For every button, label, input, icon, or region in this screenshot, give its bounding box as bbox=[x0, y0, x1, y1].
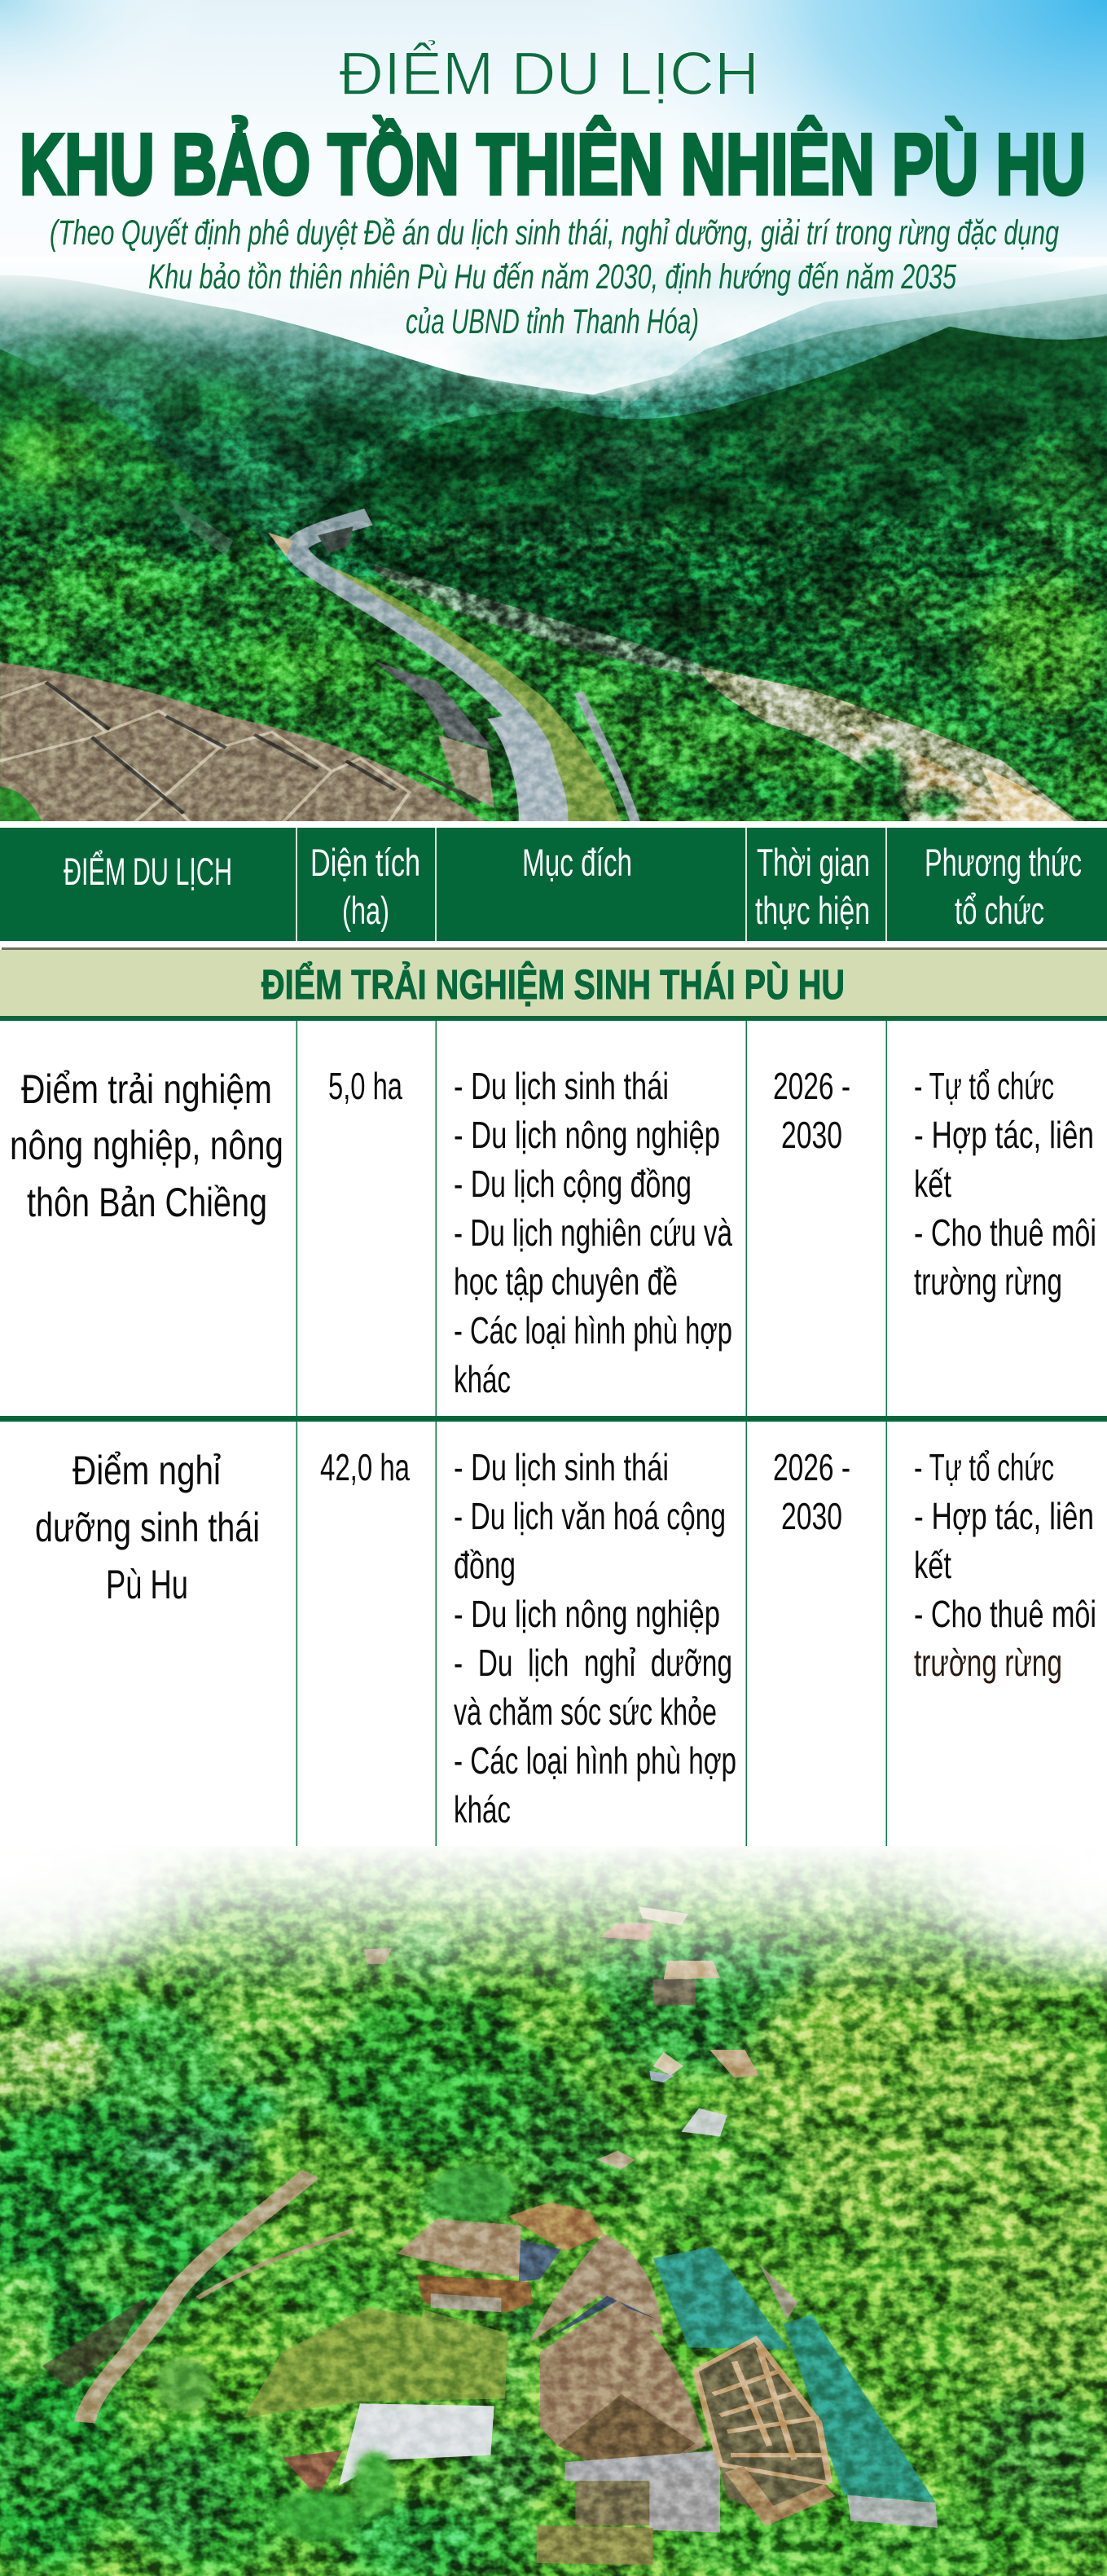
name: dưỡng sinh thái bbox=[35, 1505, 260, 1550]
table header bbox=[0, 828, 1107, 941]
table header: Thời gian bbox=[757, 841, 870, 884]
section band: ĐIỂM TRẢI NGHIỆM SINH THÁI PÙ HU bbox=[261, 961, 845, 1008]
section band bbox=[0, 947, 1107, 1021]
purpose: - Du lịch sinh thái bbox=[454, 1065, 669, 1107]
table header: ĐIỂM DU LỊCH bbox=[64, 850, 232, 893]
river and sand bank bbox=[374, 564, 1080, 823]
stilt house with thatch roof bbox=[397, 2218, 561, 2312]
retaining walls bbox=[374, 662, 494, 750]
terraced slope bbox=[0, 662, 487, 823]
hero photo: forest valley with road and sky bbox=[0, 0, 1107, 829]
purpose: - Các loại hình phù hợp bbox=[454, 1309, 732, 1352]
name: nông nghiệp, nông bbox=[10, 1123, 283, 1168]
dirt yard bbox=[508, 2202, 604, 2251]
time: 2030 bbox=[781, 1114, 842, 1156]
table header: Mục đích bbox=[522, 841, 632, 884]
time bbox=[773, 1446, 850, 1537]
column dividers bbox=[297, 1021, 887, 1846]
name bbox=[35, 1448, 260, 1607]
method bbox=[914, 1446, 1096, 1684]
name: Điểm nghỉ bbox=[72, 1448, 221, 1493]
time: 2030 bbox=[781, 1495, 842, 1537]
name: Điểm trải nghiệm bbox=[21, 1066, 272, 1112]
name: thôn Bản Chiềng bbox=[27, 1180, 267, 1225]
fog over far ridges bbox=[0, 257, 1107, 357]
purpose: - Du lịch cộng đồng bbox=[454, 1163, 692, 1205]
green verge bbox=[325, 564, 622, 823]
method bbox=[914, 1065, 1096, 1303]
banana leaves foreground bbox=[156, 2165, 516, 2542]
distant cottages bbox=[363, 1907, 759, 2169]
thatch roof lower bbox=[540, 2301, 706, 2472]
purpose bbox=[454, 1065, 732, 1400]
bottom photo: eco-lodge village and pond bbox=[0, 1729, 1107, 2576]
time bbox=[773, 1065, 850, 1156]
purpose: - Du lịch nông nghiệp bbox=[454, 1593, 720, 1635]
purpose: khác bbox=[454, 1788, 511, 1831]
highway bbox=[268, 517, 635, 823]
thatch roof upper bbox=[529, 2234, 664, 2343]
purpose: - Du lịch văn hoá cộng bbox=[454, 1495, 726, 1537]
purpose: - Du lịch nghiên cứu và bbox=[454, 1211, 732, 1254]
subtitle bbox=[50, 213, 1059, 341]
purpose: và chăm sóc sức khỏe bbox=[454, 1690, 717, 1733]
method: kết bbox=[914, 1163, 951, 1205]
dark trees along river bbox=[607, 688, 1107, 819]
purpose: đồng bbox=[454, 1544, 516, 1586]
subtitle: của UBND tỉnh Thanh Hóa) bbox=[406, 302, 699, 341]
purpose: học tập chuyên đề bbox=[454, 1260, 678, 1303]
method: kết bbox=[914, 1544, 951, 1586]
row 2: Pù Hu bbox=[35, 1446, 1096, 1831]
time: 2026 - bbox=[773, 1446, 850, 1488]
row divider bbox=[0, 1416, 1107, 1422]
title block bbox=[20, 39, 1086, 341]
purpose: - Du lịch sinh thái bbox=[454, 1446, 669, 1488]
purpose: - Du lịch nghỉ dưỡng bbox=[454, 1642, 732, 1684]
foliage masses bbox=[0, 1935, 1107, 2576]
table header: Diện tích bbox=[310, 841, 420, 884]
table header: (ha) bbox=[342, 889, 389, 932]
purpose: - Du lịch nông nghiệp bbox=[454, 1114, 720, 1156]
footpath bbox=[85, 2174, 310, 2422]
table header: tổ chức bbox=[955, 889, 1044, 932]
area: 5,0 ha bbox=[328, 1065, 402, 1107]
tree crowns bbox=[0, 1926, 1080, 2574]
timber frame bbox=[696, 2339, 829, 2516]
teal roofs bbox=[653, 2247, 938, 2528]
white tin roof bbox=[339, 2403, 494, 2486]
purpose bbox=[454, 1446, 736, 1831]
area: 42,0 ha bbox=[320, 1446, 410, 1488]
row 1: Bản Chiềng bbox=[10, 1065, 1096, 1400]
name: Pù Hu bbox=[106, 1562, 188, 1607]
table header: thực hiện bbox=[755, 889, 870, 932]
purpose: khác bbox=[454, 1358, 511, 1400]
name bbox=[10, 1066, 283, 1225]
pond bbox=[244, 2307, 508, 2418]
fire pit yard bbox=[283, 2451, 342, 2497]
purpose: - Các loại hình phù hợp bbox=[454, 1739, 736, 1782]
time: 2026 - bbox=[773, 1065, 850, 1107]
title line 1: ĐIỂM DU LỊCH bbox=[339, 39, 759, 108]
corrugated sheds bbox=[537, 2451, 720, 2565]
